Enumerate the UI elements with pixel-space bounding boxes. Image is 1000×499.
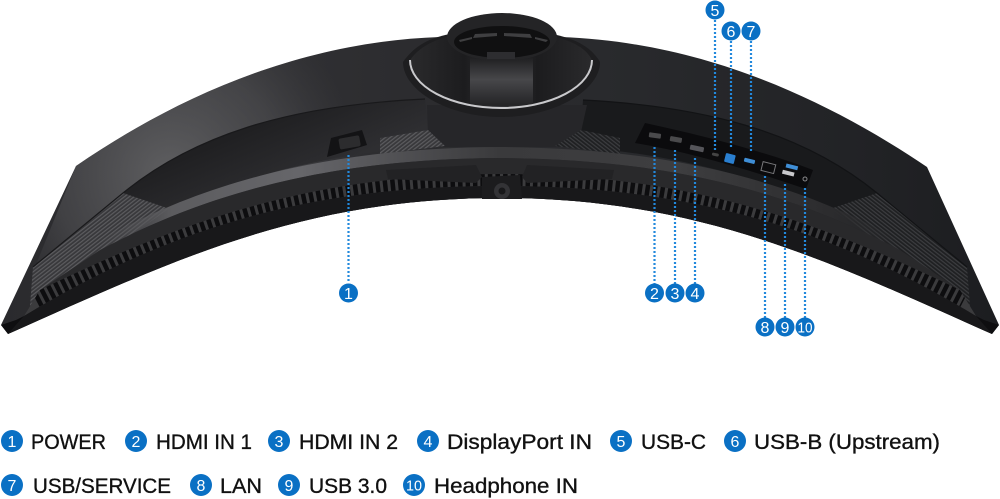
callout 5 [706, 0, 724, 150]
hole slots [459, 33, 548, 42]
ridge band [100, 147, 900, 250]
right rib texture [830, 193, 970, 306]
legend 5 USB-C: 5 [617, 434, 626, 451]
LAN port [761, 162, 776, 174]
legend 6 USB-B: USB-B (Upstream) [754, 431, 940, 454]
callout 2: 2 [650, 286, 659, 303]
power socket [327, 130, 367, 157]
top collar [447, 13, 557, 61]
crease line left [33, 99, 425, 267]
legend 3 HDMI IN 2: HDMI IN 2 [299, 431, 398, 454]
left rib texture [30, 193, 170, 306]
silver ring [410, 60, 592, 108]
left recess panel [123, 99, 445, 208]
legend 4 DisplayPort IN: 4 [424, 434, 433, 451]
callout 5: 5 [711, 3, 720, 20]
centre neck panel [470, 58, 533, 106]
legend 2 HDMI IN 1: 2 [132, 434, 141, 451]
right centre bay [522, 165, 614, 183]
callout 3: 3 [671, 286, 680, 303]
callout 10: 10 [798, 320, 812, 336]
callout 1: 1 [344, 286, 353, 303]
legend 6 USB-B: 6 [731, 434, 740, 451]
port panel [635, 123, 813, 189]
stand skirt [403, 34, 600, 117]
callout 6 [722, 22, 740, 149]
callout 8 [756, 176, 774, 337]
USB-C port [712, 152, 719, 157]
left corner [1, 316, 24, 334]
centre block under stand [427, 105, 587, 147]
bottom lip [8, 186, 992, 334]
legend 8 LAN: 8 [197, 478, 206, 495]
callout 6: 6 [727, 24, 736, 41]
callout 2 [645, 147, 664, 303]
legend [1, 430, 940, 498]
stand [403, 13, 600, 117]
vent band [8, 158, 992, 334]
legend 10 Headphone IN: Headphone IN [434, 475, 578, 498]
right corner [976, 316, 999, 334]
legend 9 USB 3.0 [278, 474, 387, 498]
HDMI 1 port [649, 132, 661, 139]
legend 9 USB 3.0: USB 3.0 [309, 475, 387, 498]
legend 10 Headphone IN: 10 [406, 478, 422, 494]
callout 4: 4 [691, 286, 700, 303]
USB-B port [724, 153, 736, 164]
vents [24, 174, 976, 316]
centre rib right [555, 130, 620, 154]
cone [410, 36, 592, 108]
hole tab [487, 52, 515, 59]
callout 7: 7 [747, 24, 756, 41]
callout 4 [686, 158, 704, 303]
right recess panel [555, 100, 877, 208]
legend 8 LAN: LAN [220, 475, 262, 498]
callout 9 [776, 184, 794, 337]
USB 3.0 ports [782, 163, 798, 177]
legend 2 HDMI IN 1: HDMI IN 1 [156, 431, 252, 454]
legend 9 USB 3.0: 9 [285, 478, 294, 495]
legend 5 USB-C: USB-C [641, 431, 706, 454]
monitor back shell [1, 37, 999, 334]
legend 1 POWER [1, 430, 106, 454]
legend 7 USB/SERVICE: 7 [8, 478, 17, 495]
callout 7 [742, 22, 760, 153]
legend 3 HDMI IN 2: 3 [275, 434, 284, 451]
legend 1 POWER: POWER [31, 431, 106, 454]
legend 8 LAN [190, 474, 262, 498]
joystick block [482, 175, 522, 199]
legend 5 USB-C [610, 430, 706, 454]
legend 4 DisplayPort IN: DisplayPort IN [447, 431, 592, 454]
callout 1 [339, 155, 358, 303]
callout 3 [666, 150, 684, 303]
left shell highlight [37, 37, 440, 262]
hole [454, 26, 550, 58]
legend 1 POWER: 1 [8, 434, 17, 451]
callout 10 [796, 188, 814, 336]
callout 8: 8 [761, 320, 770, 337]
HDMI 2 port [670, 136, 682, 143]
headphone jack [803, 177, 807, 181]
left centre bay [386, 165, 482, 183]
DisplayPort [690, 145, 704, 152]
callout 9: 9 [781, 320, 790, 337]
legend 7 USB/SERVICE: USB/SERVICE [33, 475, 171, 498]
crease line right [583, 100, 967, 267]
centre rib left [380, 130, 445, 154]
monitor [1, 37, 999, 334]
USB service port [744, 158, 755, 164]
